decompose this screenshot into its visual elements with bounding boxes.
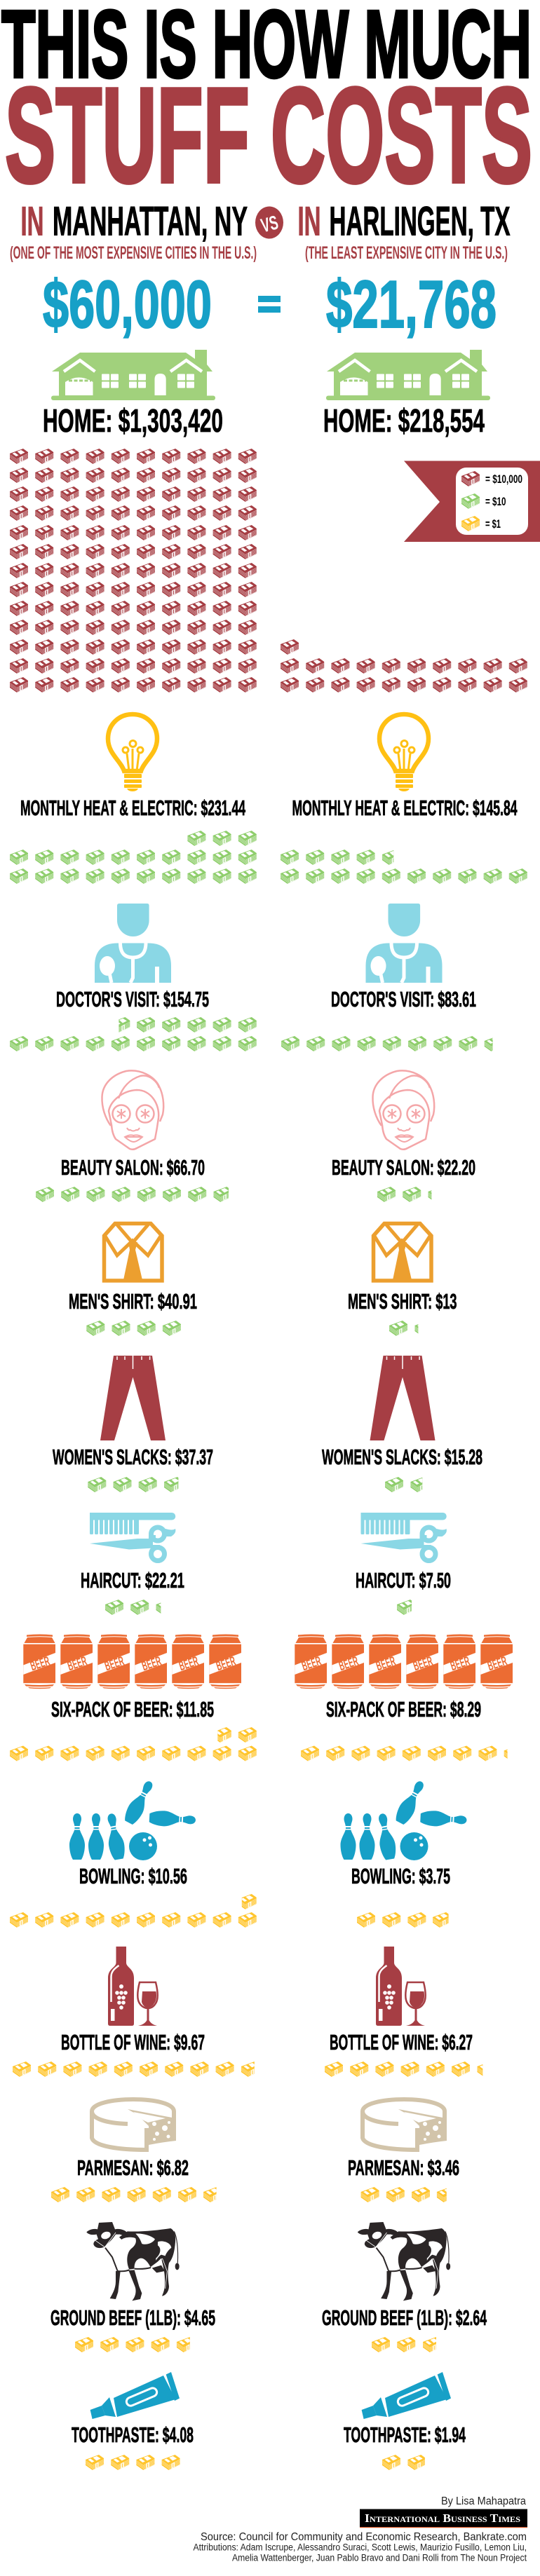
icon: six beer cans left: BEER xyxy=(66,1654,89,1674)
icon: wine left xyxy=(108,1947,158,2026)
bills: wine Manhattan xyxy=(13,2062,259,2077)
icon: six beer cans right: BEER xyxy=(412,1654,435,1674)
legend: green bill xyxy=(461,493,506,509)
bills: bowling Manhattan xyxy=(10,1894,257,1928)
versus badge xyxy=(255,206,283,238)
attributions xyxy=(194,2542,527,2563)
icon: shirt right xyxy=(373,1223,431,1281)
icon: beauty left xyxy=(102,1070,163,1150)
label: haircut Harlingen: HAIRCUT: $7.50 xyxy=(356,1568,451,1593)
legend ribbon xyxy=(404,461,540,542)
bills: beef Harlingen xyxy=(372,2337,441,2352)
bills: wine Harlingen xyxy=(325,2062,495,2077)
icon: six beer cans left: BEER xyxy=(215,1654,238,1674)
icon: cow right xyxy=(358,2222,450,2301)
publisher logo: International Business Times xyxy=(365,2512,520,2525)
byline: By Lisa Mahapatra xyxy=(441,2495,526,2507)
bills: slacks Harlingen xyxy=(385,1477,428,1492)
label: bowling Harlingen: BOWLING: $3.75 xyxy=(351,1864,450,1888)
icon: six beer cans left: BEER xyxy=(29,1654,52,1674)
icon: cow left xyxy=(86,2222,180,2301)
icon: bulb right xyxy=(379,714,428,791)
icon: six beer cans left: BEER xyxy=(140,1654,163,1674)
icon: comb and scissors right xyxy=(360,1513,447,1560)
versus badge: VS xyxy=(259,212,281,236)
bills: slacks Manhattan xyxy=(88,1477,182,1492)
icon: bowling left xyxy=(69,1778,196,1860)
icon: six beer cans left xyxy=(23,1635,241,1689)
icon: toothpaste right xyxy=(362,2372,451,2419)
label: beef Manhattan: GROUND BEEF (1LB): $4.65 xyxy=(50,2305,215,2330)
icon: slacks left xyxy=(100,1356,166,1440)
legend: green bill: = $10 xyxy=(485,495,506,508)
subheading: Manhattan: (ONE OF THE MOST EXPENSIVE CITIES IN THE U.S.) xyxy=(10,243,257,263)
legend: yellow bill: = $1 xyxy=(485,517,501,531)
icon: shirt left xyxy=(104,1223,162,1281)
bills: home Harlingen xyxy=(281,639,527,693)
icon: six beer cans right: BEER xyxy=(449,1654,472,1674)
label: heat Manhattan: MONTHLY HEAT & ELECTRIC: $231.44 xyxy=(20,796,245,820)
icon: wine right xyxy=(376,1947,426,2026)
bills: parmesan Manhattan xyxy=(51,2187,222,2202)
legend: red bill xyxy=(461,471,522,486)
label: home Manhattan: HOME: $1,303,420 xyxy=(43,402,223,439)
icon: six beer cans right: BEER xyxy=(486,1654,509,1674)
bills: doctor Manhattan xyxy=(10,1017,257,1051)
bills: doctor Harlingen xyxy=(281,1036,503,1051)
icon: cheese left xyxy=(92,2099,176,2150)
bills: home Manhattan xyxy=(10,449,257,693)
icon: slacks right xyxy=(370,1356,435,1440)
icon: six beer cans right xyxy=(295,1635,513,1689)
bills: toothpaste Manhattan xyxy=(86,2455,180,2470)
bills: beauty Harlingen xyxy=(377,1187,446,1202)
label: haircut Manhattan: HAIRCUT: $22.21 xyxy=(81,1568,184,1593)
icon: six beer cans right: BEER xyxy=(300,1654,323,1674)
bills: beauty Manhattan xyxy=(36,1187,231,1202)
icon: house right xyxy=(326,350,490,400)
bills: haircut Harlingen xyxy=(397,1600,412,1615)
icon: six beer cans right: BEER xyxy=(337,1654,360,1674)
icon: doctor right xyxy=(366,904,442,983)
icon: six beer cans right: BEER xyxy=(374,1654,398,1674)
label: beer Manhattan: SIX-PACK OF BEER: $11.85 xyxy=(51,1697,214,1722)
label: doctor Manhattan: DOCTOR'S VISIT: $154.75 xyxy=(56,987,209,1011)
bills: parmesan Harlingen xyxy=(361,2187,455,2202)
icon: six beer cans left: BEER xyxy=(103,1654,126,1674)
icon: house left xyxy=(51,350,215,400)
bills: shirt Manhattan xyxy=(86,1321,181,1336)
icon: toothpaste left xyxy=(90,2372,180,2419)
bills: beef Manhattan xyxy=(75,2337,195,2352)
city heading: Harlingen: IN xyxy=(297,199,321,244)
city heading: Manhattan xyxy=(21,199,248,244)
city heading: Manhattan: IN xyxy=(21,199,43,244)
legend: yellow bill xyxy=(461,516,501,531)
bills: shirt Harlingen xyxy=(389,1321,433,1336)
icon: comb and scissors left xyxy=(90,1513,175,1560)
label: bowling Manhattan: BOWLING: $10.56 xyxy=(79,1864,187,1888)
icon: bowling right xyxy=(341,1778,467,1860)
icon: bulb left xyxy=(108,714,157,791)
label: toothpaste Manhattan: TOOTHPASTE: $4.08 xyxy=(72,2422,194,2447)
bills: beer Harlingen xyxy=(301,1745,522,1761)
icon: doctor left xyxy=(95,904,171,983)
label: shirt Harlingen: MEN'S SHIRT: $13 xyxy=(348,1289,457,1314)
label: parmesan Harlingen: PARMESAN: $3.46 xyxy=(348,2155,459,2180)
equals sign xyxy=(258,296,281,313)
label: shirt Manhattan: MEN'S SHIRT: $40.91 xyxy=(69,1289,197,1314)
icon: beauty right xyxy=(372,1070,434,1150)
icon: cheese right xyxy=(363,2099,447,2150)
label: slacks Manhattan: WOMEN'S SLACKS: $37.37 xyxy=(53,1445,213,1469)
city heading: Manhattan: MANHATTAN, NY xyxy=(53,199,248,244)
bills: bowling Harlingen xyxy=(357,1912,451,1928)
bills: heat Harlingen xyxy=(281,850,527,884)
legend: red bill: = $10,000 xyxy=(485,472,522,486)
bills: haircut Manhattan xyxy=(105,1600,174,1615)
label: wine Manhattan: BOTTLE OF WINE: $9.67 xyxy=(61,2030,205,2054)
bills: toothpaste Harlingen xyxy=(382,2455,426,2470)
publisher logo xyxy=(360,2509,527,2528)
salary: Manhattan: $60,000 xyxy=(43,267,212,342)
icon: six beer cans left: BEER xyxy=(177,1654,201,1674)
bills: beer Manhattan xyxy=(10,1727,257,1761)
label: parmesan Manhattan: PARMESAN: $6.82 xyxy=(77,2155,189,2180)
bills: heat Manhattan xyxy=(10,831,257,884)
label: beauty Manhattan: BEAUTY SALON: $66.70 xyxy=(61,1155,205,1180)
